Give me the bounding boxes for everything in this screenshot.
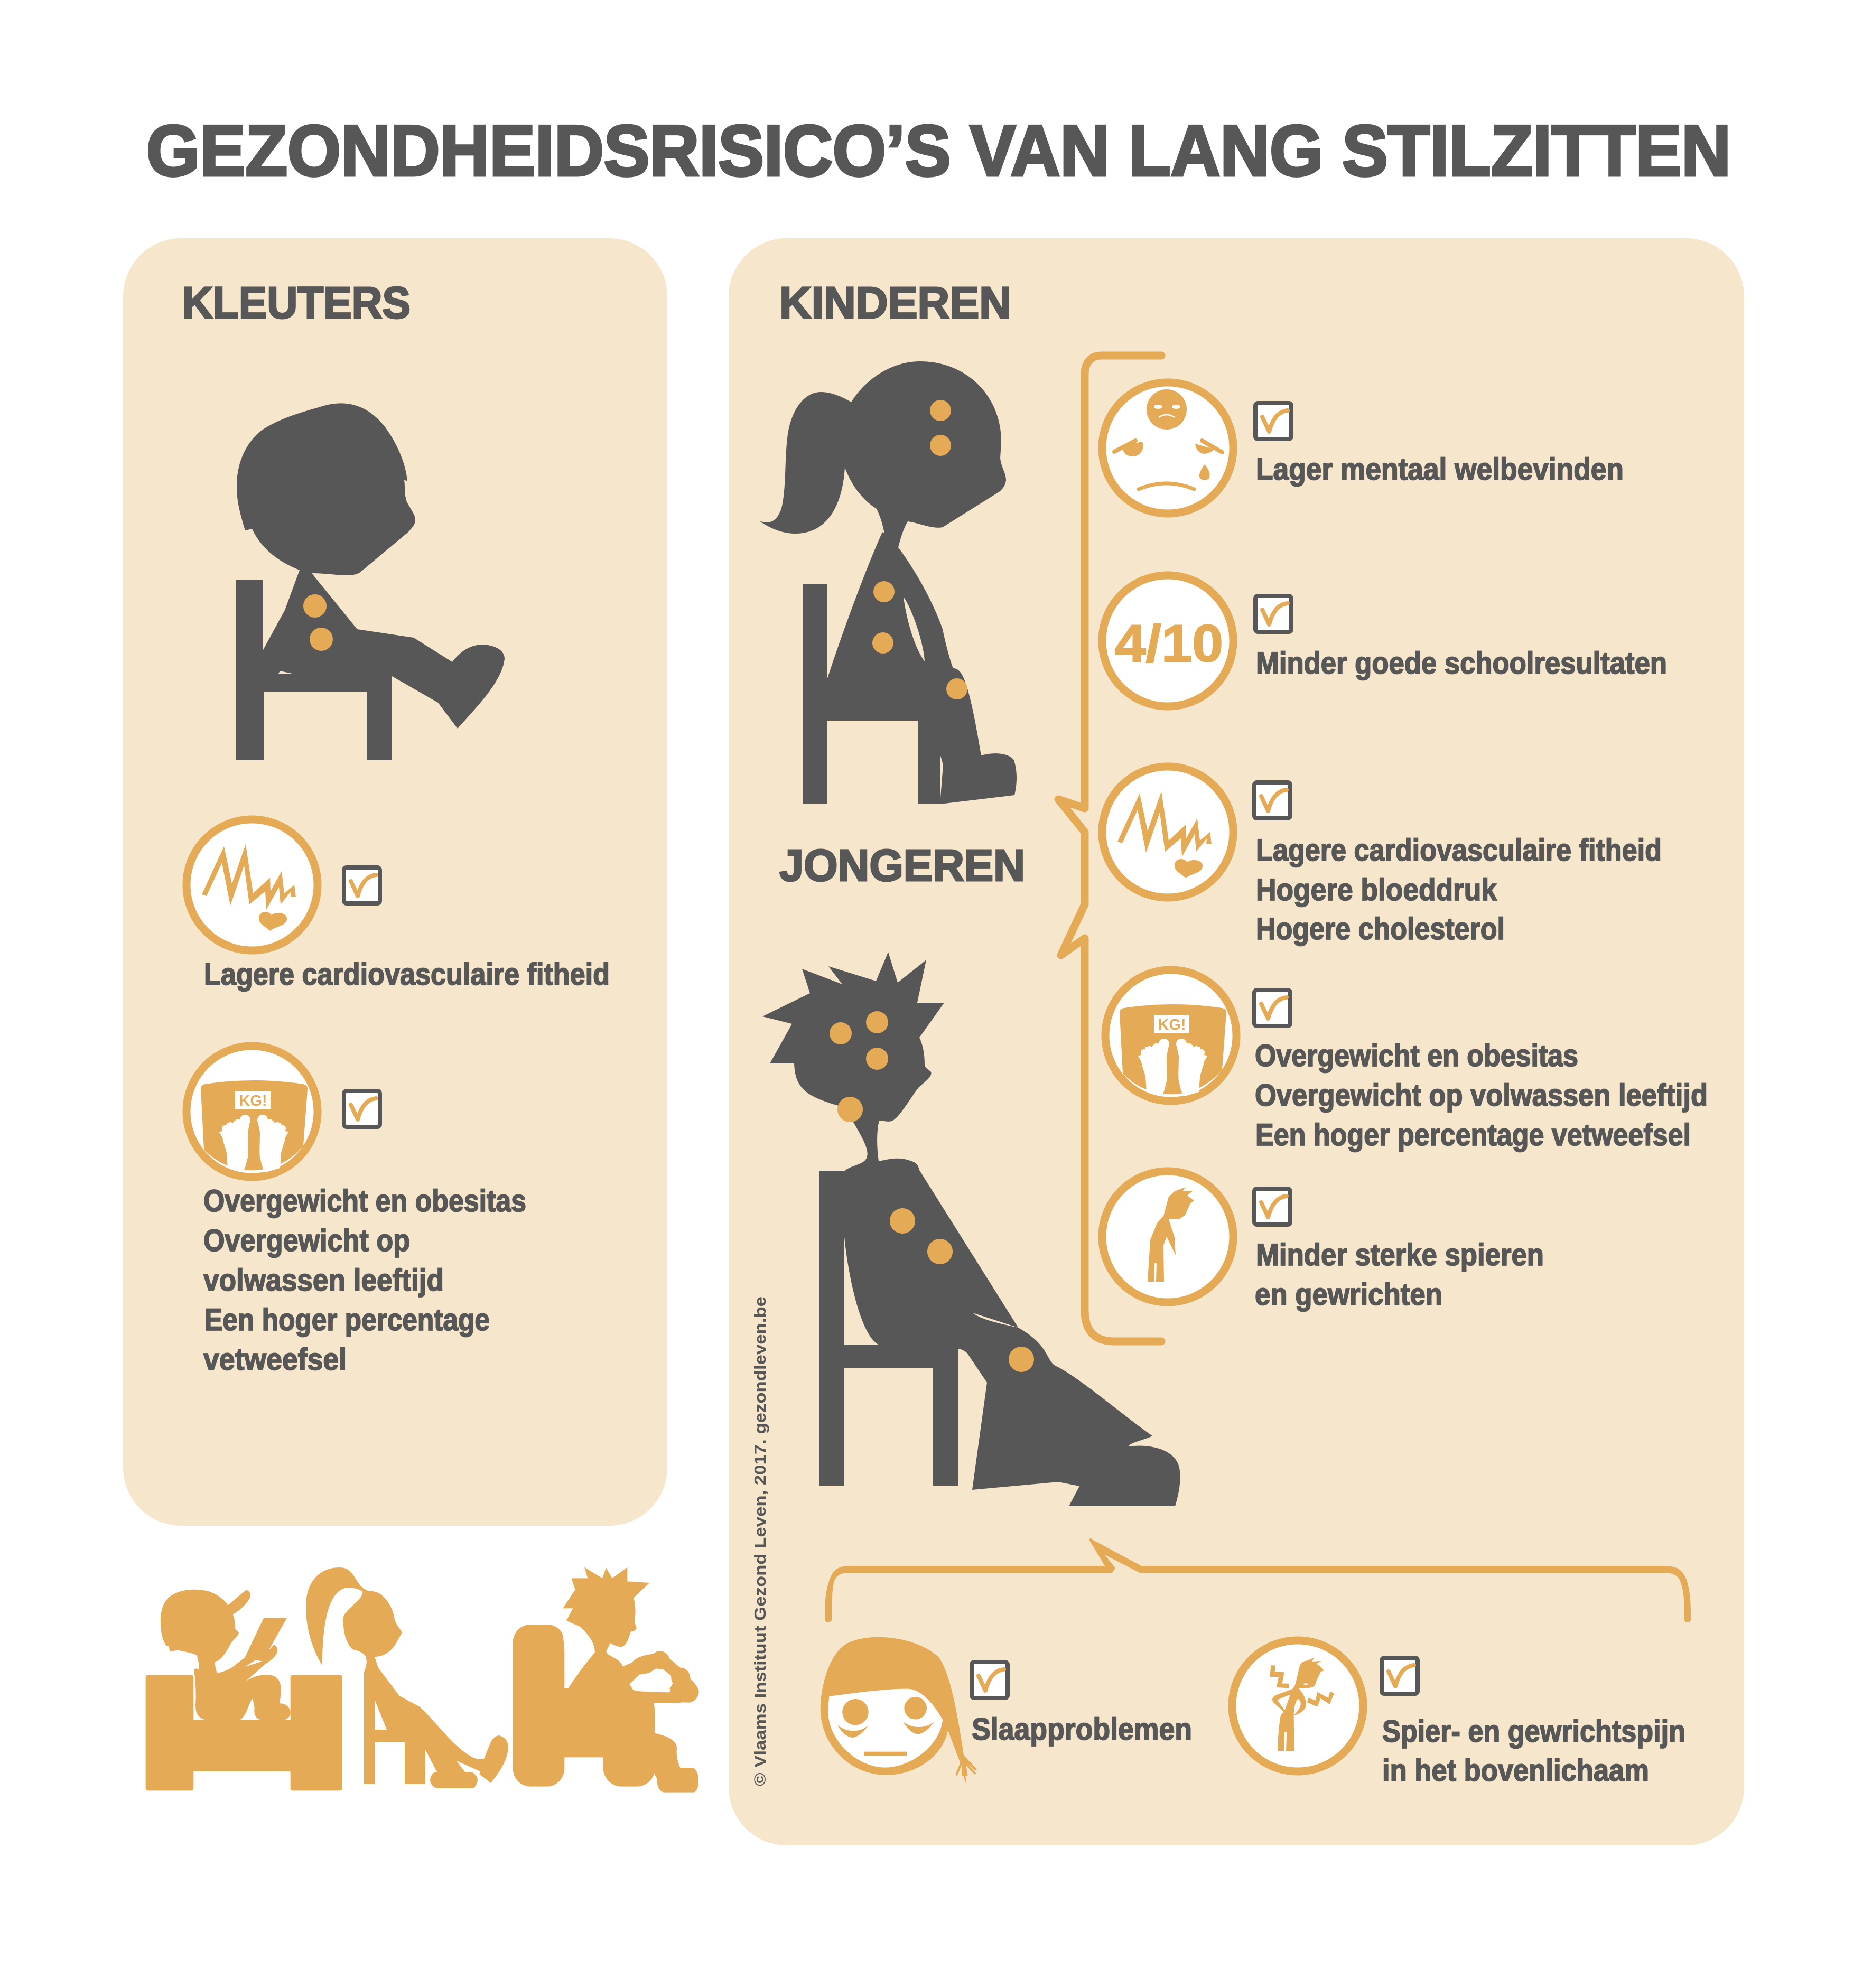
icon: scale with feet, kleuters: [187, 1046, 318, 1177]
text block: overgewicht kleuters: Een hoger percentage: [204, 1303, 490, 1337]
checkbox: [1254, 990, 1290, 1026]
bracket: right of kinderen and jongeren: [1058, 356, 1161, 1341]
panel: kleuters: [123, 238, 667, 1526]
checkbox: [972, 1662, 1008, 1698]
text block: cardiovasculair: Lagere cardiovasculaire fitheid: [1256, 833, 1662, 867]
text block: overgewicht kleuters: vetweefsel: [203, 1342, 347, 1377]
text block: overgewicht kleuters: [203, 1184, 526, 1377]
text block: spier- en gewrichtspijn: Spier- en gewrichtspijn: [1382, 1714, 1685, 1749]
panel: kinderen en jongeren: [729, 238, 1744, 1845]
text block: cardiovasculair: Hogere cholesterol: [1256, 912, 1505, 946]
text block: overgewicht kleuters: Overgewicht op: [203, 1224, 410, 1258]
heading: kleuters: KLEUTERS: [182, 278, 411, 328]
boy with food: [513, 1567, 699, 1793]
title: GEZONDHEIDSRISICO’S VAN LANG STILZITTEN: [146, 110, 1731, 191]
text block: spier- en gewrichtspijn: in het bovenlichaam: [1382, 1753, 1649, 1788]
checkbox: [344, 1091, 380, 1127]
text block: overgewicht: Overgewicht en obesitas: [1255, 1039, 1578, 1073]
child in armchair with book: [146, 1590, 342, 1790]
icon: bent figure weak muscles: [1102, 1171, 1233, 1302]
checkbox: [1255, 596, 1291, 632]
checkbox: [1255, 403, 1291, 439]
icon: school score 4/10: [1102, 575, 1233, 706]
figure: sitting teenager (jongeren): [762, 952, 1180, 1506]
text block: spieren en gewrichten: [1255, 1238, 1544, 1312]
checkbox: [344, 867, 380, 903]
icon: sleeping head with nightcap: [821, 1637, 977, 1785]
bracket: below jongeren: [825, 1538, 1691, 1622]
icon: figure with pain bolts: [1232, 1640, 1363, 1771]
illustration: three sitting children: [146, 1567, 699, 1793]
text block: overgewicht kleuters: volwassen leeftijd: [203, 1263, 444, 1298]
text block: overgewicht: Overgewicht op volwassen leeftijd: [1255, 1078, 1708, 1113]
heading: kinderen: KINDEREN: [779, 278, 1011, 328]
text block: overgewicht: Een hoger percentage vetweefsel: [1255, 1118, 1691, 1152]
heading: jongeren: JONGEREN: [779, 841, 1025, 890]
icon: sad mood: [1102, 382, 1233, 514]
copyright line: © Vlaams Instituut Gezond Leven, 2017. gezondleven.be: [751, 1296, 769, 1786]
icon: scale with feet, kinderen: [1105, 970, 1236, 1101]
text block: spieren en gewrichten: Minder sterke spieren: [1256, 1238, 1544, 1272]
figure: sitting girl (kinderen): [759, 361, 1017, 804]
figure: sitting toddler: [236, 403, 505, 760]
text: mentaal welbevinden: Lager mentaal welbevinden: [1256, 452, 1624, 487]
text block: overgewicht: [1255, 1039, 1708, 1152]
icon: heart rate, kinderen: [1102, 767, 1233, 898]
text block: spieren en gewrichten: en gewrichten: [1255, 1277, 1442, 1312]
text block: cardiovasculair: Hogere bloeddruk: [1256, 873, 1497, 907]
text block: overgewicht kleuters: Overgewicht en obesitas: [203, 1184, 526, 1218]
checkbox: [1382, 1658, 1418, 1694]
icon: school score 4/10: 4/10: [1115, 614, 1223, 673]
text block: cardiovasculair: [1256, 833, 1662, 946]
text: schoolresultaten: Minder goede schoolresultaten: [1256, 646, 1667, 680]
checkbox: [1254, 1189, 1290, 1225]
checkbox: [1254, 782, 1290, 818]
text: slaapproblemen: Slaapproblemen: [972, 1712, 1192, 1747]
girl on chair: [306, 1567, 508, 1788]
icon: heart rate, kleuters: [187, 819, 318, 950]
text: cardiovasculaire fitheid: Lagere cardiovasculaire fitheid: [204, 957, 610, 992]
text block: spier- en gewrichtspijn: [1382, 1714, 1685, 1788]
